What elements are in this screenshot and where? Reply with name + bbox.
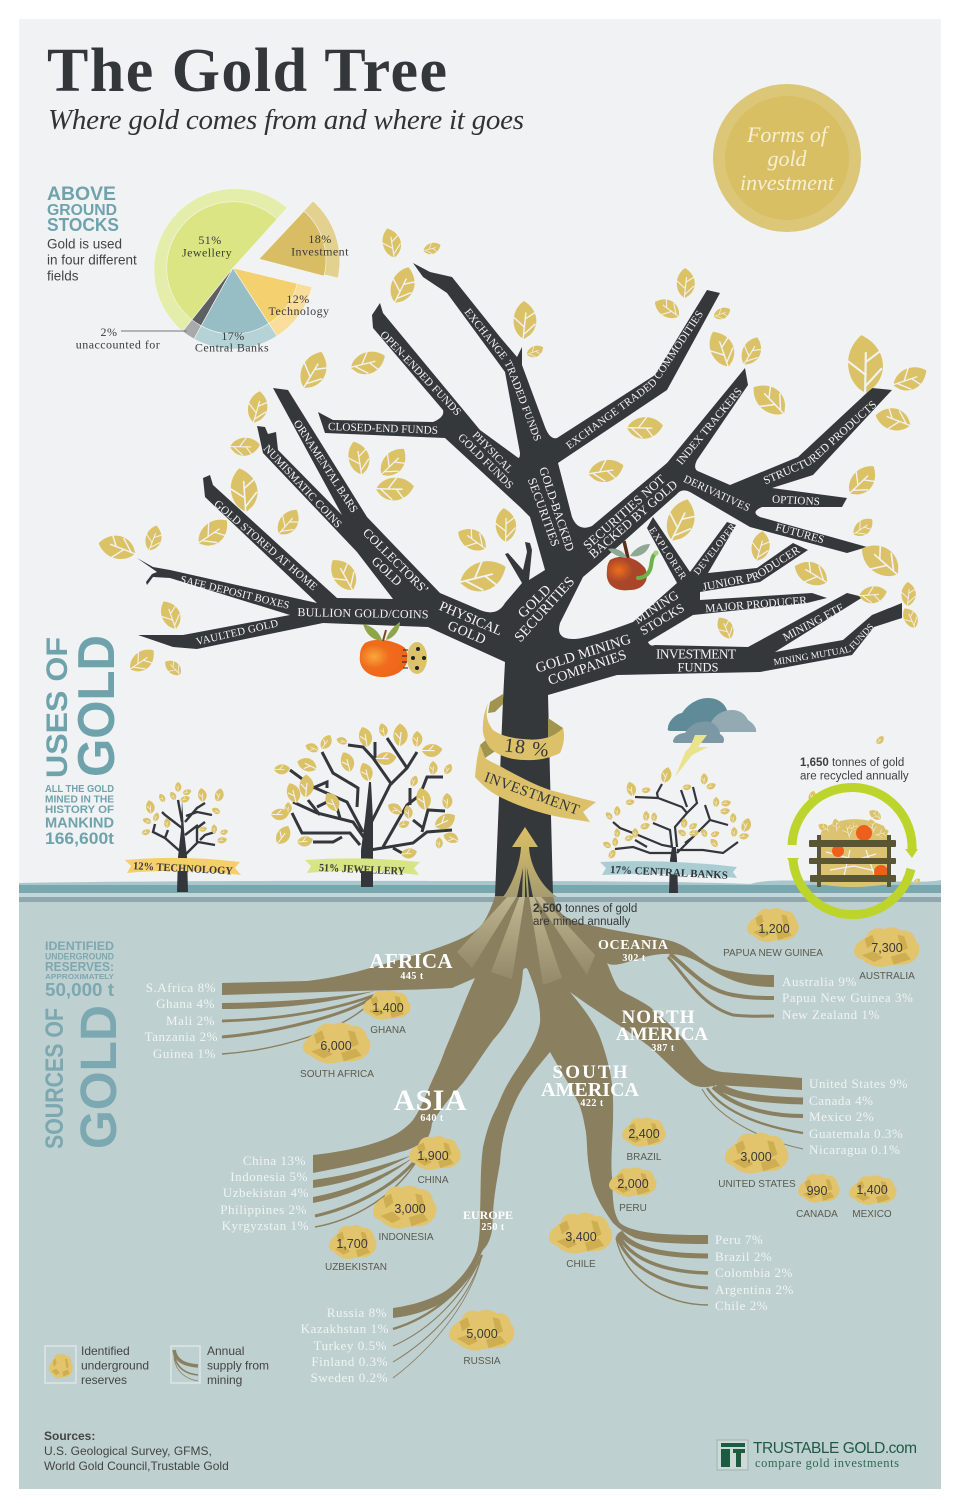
banner: 17% central banks: 17% CENTRAL BANKS — [610, 864, 728, 882]
tree: branch labels: FUTURES — [774, 521, 825, 546]
logo: trustable gold: TRUSTABLE GOLD.com — [753, 1440, 917, 1457]
region labels: OCEANIA — [598, 938, 669, 953]
country shares: europe: Finland 0.3% — [311, 1354, 388, 1369]
region labels — [370, 938, 708, 1233]
pie chart: above ground stocks: Central Banks — [195, 340, 269, 354]
heading: above ground stocks: fields — [47, 268, 79, 284]
badge: forms of gold investment — [713, 84, 861, 232]
country shares: south america: Brazil 2% — [715, 1249, 772, 1264]
reserves: nuggets: UZBEKISTAN — [325, 1262, 387, 1273]
small tree: technology — [141, 782, 229, 892]
tree: ribbon 18% investment — [475, 694, 596, 822]
pie chart: above ground stocks: 51% — [198, 233, 222, 247]
legend: annual supply from mining: supply from — [207, 1358, 269, 1372]
tree: branch labels: GOLD-BACKED — [536, 465, 577, 553]
heading: sources of gold: 50,000 t — [45, 980, 114, 1000]
country shares: asia: Uzbekistan 4% — [223, 1185, 309, 1200]
country shares: asia: Philippines 2% — [220, 1202, 307, 1217]
tree: branch labels: NUMISMATIC COINS — [261, 443, 344, 531]
logo: trustable gold — [717, 1440, 917, 1470]
region labels: 387 t — [651, 1043, 675, 1054]
legend: annual supply from mining: Annual — [207, 1344, 244, 1358]
tree: branch labels: STOCKS — [638, 601, 687, 638]
apple with ladybird — [360, 622, 427, 677]
heading: uses of gold: MANKIND — [45, 814, 114, 832]
country shares: europe: Sweden 0.2% — [310, 1370, 388, 1385]
heading: uses of gold — [41, 635, 126, 848]
heading: sources of gold: SOURCES OF — [41, 1008, 69, 1149]
tree: ribbon 18% investment: 18 % — [503, 734, 551, 762]
tree: branch labels: GOLD — [515, 582, 555, 622]
country shares: europe: Turkey 0.5% — [314, 1338, 387, 1353]
region labels: AMERICA — [541, 1079, 640, 1101]
reserves: nuggets: 1,200 — [758, 922, 790, 936]
legend: identified underground reserves: underground — [81, 1358, 149, 1372]
heading: above ground stocks: GROUND — [47, 202, 117, 219]
legend: annual supply from mining — [171, 1344, 269, 1387]
text: recycled annually: 1,650 tonnes of gold — [800, 757, 904, 769]
text: recycled annually — [800, 757, 909, 782]
tree: branch labels: FUNDS — [678, 660, 719, 674]
banner: 51% jewellery: 51% JEWELLERY — [319, 862, 405, 878]
tree: branch labels: INDEX TRACKERS — [675, 386, 745, 467]
region labels: NORTH — [622, 1007, 695, 1028]
pie chart: above ground stocks: 18% — [308, 232, 332, 246]
country shares: europe: Russia 8% — [327, 1305, 387, 1320]
badge: forms of gold investment: gold — [767, 146, 808, 171]
reserves: nuggets: 1,700 — [336, 1237, 368, 1251]
region labels: EUROPE — [463, 1208, 513, 1222]
small tree: jewellery — [270, 722, 460, 887]
pie chart: above ground stocks: 17% — [221, 329, 245, 343]
legend: identified underground reserves — [45, 1344, 149, 1387]
tree: leaves — [96, 226, 931, 679]
tree: branch labels: OPEN-ENDED FUNDS — [377, 329, 463, 418]
country shares: north america: Canada 4% — [809, 1093, 874, 1108]
reserves: nuggets: INDONESIA — [378, 1232, 434, 1243]
reserves: nuggets: 2,400 — [628, 1127, 660, 1141]
country shares: oceania: Australia 9% — [782, 974, 857, 989]
heading: uses of gold: GOLD — [68, 635, 126, 777]
tree: branch labels: EXPLORER — [646, 525, 688, 582]
country shares: africa: Guinea 1% — [153, 1046, 216, 1061]
reserves: nuggets: 3,400 — [565, 1230, 597, 1244]
heading: uses of gold: ALL THE GOLD — [45, 784, 114, 795]
tree: branch labels: GOLD — [369, 553, 405, 589]
reserves: nuggets: RUSSIA — [463, 1356, 501, 1367]
tree: branch labels: MINING ETF — [781, 602, 846, 644]
reserves: nuggets: 3,000 — [394, 1202, 426, 1216]
icon: lightning bolt — [675, 735, 708, 777]
tree: branch labels: BACKED BY GOLD — [586, 477, 680, 561]
reserves: nuggets: 1,400 — [372, 1001, 404, 1015]
reserves: nuggets: 3,000 — [740, 1150, 772, 1164]
region labels: 445 t — [400, 971, 424, 982]
badge: forms of gold investment: investment — [740, 170, 835, 195]
tree: branch labels: GOLD FUNDS — [455, 432, 515, 492]
sources: Sources: — [44, 1429, 95, 1443]
heading: sources of gold — [41, 939, 127, 1149]
tree: branch labels: SAFE DEPOSIT BOXES — [179, 574, 291, 612]
region labels: 250 t — [481, 1222, 505, 1233]
reserves: nuggets: 7,300 — [871, 941, 903, 955]
banner: 51% jewellery — [305, 858, 420, 878]
tree: branch labels: COMPANIES — [546, 647, 629, 689]
tree: branch labels: GOLD — [445, 619, 488, 648]
subtitle: Where gold comes from and where it goes — [48, 104, 524, 136]
text: recycled annually: are recycled annually — [800, 770, 909, 782]
tree: branch labels: SECURITIES — [511, 574, 578, 646]
water band — [19, 880, 941, 902]
heading: uses of gold: 166,600t — [45, 829, 114, 848]
tree: branch labels: SECURITIES — [525, 476, 563, 548]
country shares: asia: Kyrgyzstan 1% — [222, 1218, 309, 1233]
arrow: gold flowing up the trunk — [503, 827, 557, 897]
logo: trustable gold: compare gold investments — [755, 1456, 899, 1470]
tree: branch labels: MINING — [631, 587, 681, 627]
tree: branch labels: DERIVATIVES — [681, 473, 752, 514]
country shares: south america: Colombia 2% — [715, 1265, 793, 1280]
sources: U.S. Geological Survey, GFMS, — [44, 1444, 212, 1458]
pie chart: above ground stocks: Technology — [269, 304, 329, 318]
reserves: nuggets: SOUTH AFRICA — [300, 1069, 374, 1080]
pie chart: above ground stocks — [76, 189, 349, 354]
small tree: central banks — [602, 766, 753, 893]
apple with worm — [607, 541, 659, 590]
heading: above ground stocks: STOCKS — [47, 215, 119, 235]
icon: storm cloud — [668, 698, 756, 743]
roots: fan highlights — [457, 885, 595, 985]
reserves: nuggets: CANADA — [796, 1209, 838, 1220]
country shares: north america: Nicaragua 0.1% — [809, 1142, 900, 1157]
pie chart: above ground stocks: 12% — [286, 292, 310, 306]
country shares: europe — [301, 1305, 389, 1385]
heading: above ground stocks: Gold is used — [47, 236, 122, 252]
reserves: nuggets: 1,900 — [417, 1149, 449, 1163]
country shares: south america: Peru 7% — [715, 1232, 763, 1247]
pie chart: above ground stocks: Investment — [291, 244, 349, 258]
badge: forms of gold investment: Forms of — [746, 122, 830, 147]
legend: annual supply from mining: mining — [207, 1373, 242, 1387]
country shares: north america: Mexico 2% — [809, 1109, 874, 1124]
tree: branch labels: ORNAMENTAL BARS — [291, 418, 360, 515]
tree: branch labels: COLLECTORS’ — [360, 526, 431, 597]
tree: branch labels: PHYSICAL — [470, 429, 515, 476]
region labels: SOUTH — [552, 1062, 628, 1083]
pie chart: above ground stocks: 2% — [101, 325, 117, 339]
region labels: 302 t — [622, 953, 646, 964]
text: mined annually: are mined annually — [533, 916, 630, 928]
region labels: AMERICA — [616, 1024, 708, 1045]
ground — [19, 902, 941, 1489]
heading: uses of gold: HISTORY OF — [45, 804, 114, 816]
tree: branch labels: PHYSICAL — [437, 599, 504, 639]
legend: identified underground reserves: reserves — [81, 1373, 127, 1387]
country shares: oceania — [782, 974, 913, 1022]
country shares: oceania: New Zealand 1% — [782, 1007, 880, 1022]
reserves: nuggets: CHILE — [566, 1259, 596, 1270]
country shares: north america — [809, 1076, 908, 1157]
tree: branch labels: SECURITIES NOT — [580, 471, 668, 553]
reserves: nuggets: 6,000 — [320, 1039, 352, 1053]
heading: uses of gold: USES OF — [41, 637, 74, 778]
region labels: 640 t — [420, 1113, 444, 1124]
country shares: africa: Mali 2% — [166, 1013, 215, 1028]
country shares: south america: Chile 2% — [715, 1298, 768, 1313]
reserves: nuggets: 1,400 — [856, 1183, 888, 1197]
country shares: africa — [145, 980, 218, 1061]
legend: identified underground reserves: Identified — [81, 1344, 130, 1358]
tree: branch labels: GOLD MINING — [534, 631, 633, 677]
country shares: africa: S.Africa 8% — [146, 980, 216, 995]
pie chart: above ground stocks: unaccounted for — [76, 338, 160, 352]
heading: sources of gold: GOLD — [70, 1005, 127, 1149]
tree: branch labels: GOLD STORED AT HOME — [211, 498, 319, 593]
heading: sources of gold: RESERVES: — [45, 959, 114, 974]
tree: branch labels — [179, 308, 876, 689]
heading: sources of gold: UNDERGROUND — [45, 952, 114, 962]
country shares: south america — [715, 1232, 794, 1313]
tree: branch labels: EXCHANGE TRADED FUNDS — [464, 308, 542, 441]
reserves: nuggets: 990 — [807, 1184, 827, 1198]
heading: sources of gold: IDENTIFIED — [45, 939, 114, 953]
country shares: asia: Indonesia 5% — [230, 1169, 308, 1184]
tree: branch labels: JUNIOR PRODUCER — [703, 547, 801, 591]
reserves: nuggets: UNITED STATES — [718, 1179, 796, 1190]
region labels: ASIA — [394, 1084, 467, 1117]
icon: compost crate and recycling ring — [787, 734, 921, 915]
roots: country feeder lines — [222, 954, 803, 1378]
country shares: africa: Tanzania 2% — [145, 1029, 218, 1044]
sources: World Gold Council,Trustable Gold — [44, 1459, 229, 1473]
tree: branch labels: EXCHANGE TRADED COMMODITIES — [565, 310, 702, 450]
roots: annual supply from mining — [222, 896, 802, 1318]
tree: branch labels: CLOSED-END FUNDS — [328, 421, 438, 437]
reserves: nuggets: BRAZIL — [626, 1152, 662, 1163]
country shares: north america: Guatemala 0.3% — [809, 1126, 903, 1141]
text: mined annually: 2,500 tonnes of gold — [533, 903, 637, 915]
tree: branches and trunk — [137, 263, 902, 896]
tree: branch labels: STRUCTURED PRODUCTS — [764, 400, 876, 484]
title: The Gold Tree — [47, 37, 447, 105]
tree: branch labels: VAULTED GOLD — [195, 617, 280, 648]
country shares: south america: Argentina 2% — [715, 1282, 794, 1297]
reserves: nuggets: MEXICO — [852, 1209, 892, 1220]
heading: above ground stocks — [47, 184, 137, 284]
tree: branch labels: INVESTMENT — [656, 647, 736, 662]
banner: 12% technology: 12% TECHNOLOGY — [133, 860, 233, 877]
country shares: africa: Ghana 4% — [156, 996, 215, 1011]
region labels: 422 t — [580, 1098, 604, 1109]
reserves: nuggets: PERU — [619, 1203, 647, 1214]
reserves: nuggets: PAPUA NEW GUINEA — [723, 948, 823, 959]
reserves: nuggets — [300, 908, 919, 1367]
heading: above ground stocks: in four different — [47, 252, 137, 268]
country shares: asia: China 13% — [243, 1153, 306, 1168]
sources — [44, 1429, 229, 1473]
tree: branch labels: BULLION GOLD/COINS — [297, 605, 429, 621]
pie chart: above ground stocks: Jewellery — [182, 246, 232, 260]
reserves: nuggets: 2,000 — [617, 1177, 649, 1191]
tree: branch labels: MAJOR PRODUCER — [705, 595, 808, 615]
reserves: nuggets: AUSTRALIA — [859, 971, 915, 982]
reserves: nuggets: GHANA — [370, 1025, 406, 1036]
heading: above ground stocks: ABOVE — [47, 184, 116, 205]
tree: branch labels: OPTIONS — [772, 494, 820, 508]
country shares: europe: Kazakhstan 1% — [301, 1321, 389, 1336]
reserves: nuggets: 5,000 — [466, 1327, 498, 1341]
country shares: asia — [220, 1153, 309, 1233]
country shares: oceania: Papua New Guinea 3% — [782, 990, 913, 1005]
country shares: north america: United States 9% — [809, 1076, 908, 1091]
reserves: nuggets: CHINA — [417, 1175, 449, 1186]
tree: branch labels: DEVELOPER — [692, 521, 739, 577]
tree: branch labels: MINING MUTUAL FUNDS — [773, 624, 874, 666]
tree: ribbon 18% investment: INVESTMENT — [482, 770, 581, 819]
heading: uses of gold: MINED IN THE — [45, 794, 114, 806]
region labels: AFRICA — [370, 949, 453, 973]
heading: sources of gold: APPROXIMATELY — [45, 972, 114, 981]
text: mined annually — [533, 903, 637, 928]
